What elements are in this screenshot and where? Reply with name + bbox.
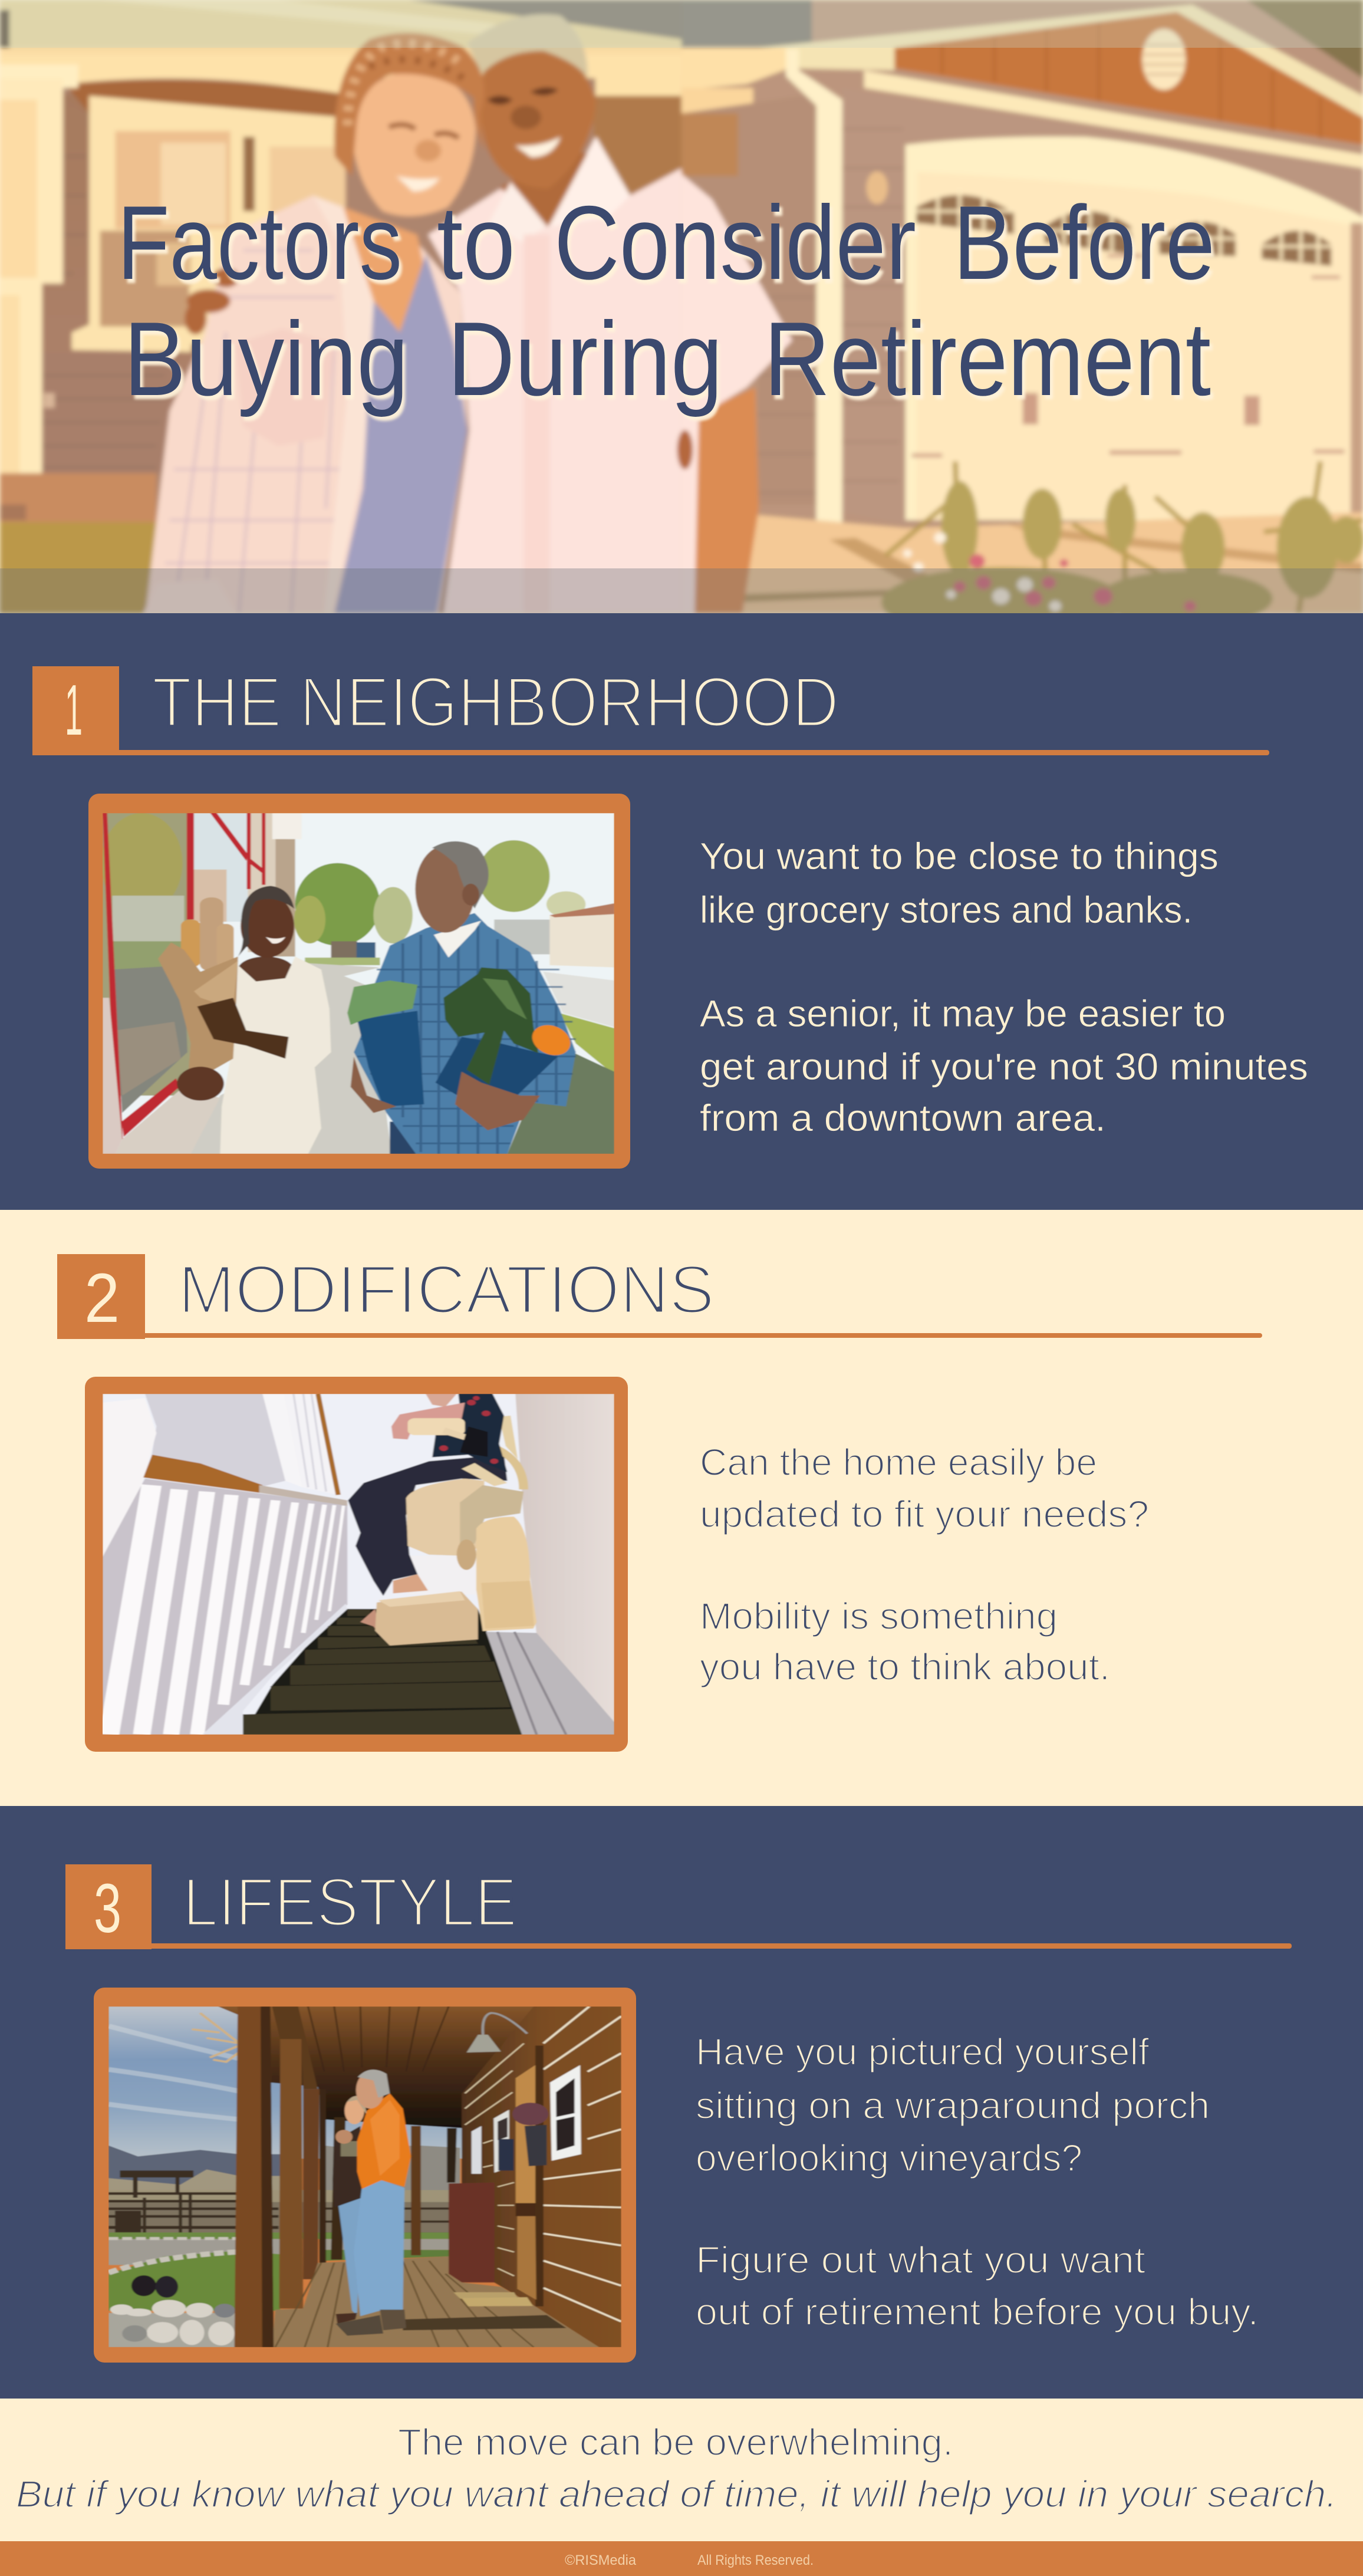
heading: modifications: MODIFICATIONS xyxy=(178,1251,715,1328)
bushes xyxy=(885,462,1363,613)
title: During xyxy=(447,300,723,417)
number badge 1: 1 xyxy=(65,670,83,750)
woman's shirt xyxy=(146,196,467,613)
text block: section 2: you have to think about. xyxy=(700,1646,1110,1688)
title xyxy=(117,184,1215,417)
far balusters xyxy=(262,1394,302,1487)
flower pot xyxy=(512,2103,548,2126)
text block: section 1: from a downtown area. xyxy=(700,1097,1106,1139)
text block: section 1: get around if you're not 30 minutes xyxy=(700,1045,1308,1088)
hands xyxy=(351,1057,396,1113)
gap under seat xyxy=(408,1556,476,1595)
mountains xyxy=(108,2146,280,2202)
track housing xyxy=(476,1516,536,1631)
heading underline xyxy=(65,1943,1292,1949)
handrail xyxy=(143,1455,262,1493)
right log wall xyxy=(462,2006,621,2347)
photo frame 1 xyxy=(88,794,630,1169)
trees xyxy=(295,863,380,946)
closing text: But if you know what you want ahead of time, it will help you in your search. xyxy=(16,2473,1337,2515)
closing text: The move can be overwhelming. xyxy=(398,2421,953,2463)
front post xyxy=(235,2006,274,2347)
woman xyxy=(337,2197,362,2315)
ceiling xyxy=(218,2006,534,2128)
stairs xyxy=(243,1609,527,1735)
footer credits: ©RISMedia xyxy=(565,2552,637,2568)
number badge 3: 3 xyxy=(94,1870,121,1947)
panel: section 2 modifications xyxy=(0,1210,1363,1806)
windows xyxy=(550,2065,581,2161)
background buildings xyxy=(494,920,549,955)
stair rail xyxy=(486,1632,614,1735)
bags and greens xyxy=(357,1011,424,1107)
text block: section 2: Mobility is something xyxy=(700,1595,1058,1637)
boots xyxy=(336,2313,357,2324)
woman's top xyxy=(335,254,467,613)
bottom darker band xyxy=(0,568,1363,613)
title: Factors xyxy=(117,184,402,301)
text block: section 1: As a senior, it may be easier to xyxy=(700,992,1226,1035)
panel: section 1 the neighborhood xyxy=(0,613,1363,1210)
photo: couple with groceries xyxy=(101,813,614,1154)
photo: senior couple in front of house xyxy=(0,0,1363,637)
door xyxy=(535,2045,544,2307)
white stringer xyxy=(202,1604,347,1735)
heading underline xyxy=(57,1333,1262,1338)
title: Retirement xyxy=(764,300,1211,417)
heading: lifestyle: LIFESTYLE xyxy=(183,1864,517,1940)
text block: section 2: Can the home easily be xyxy=(700,1441,1097,1483)
footer credits xyxy=(565,2552,814,2568)
title: Before xyxy=(953,184,1215,301)
text block: section 2: updated to fit your needs? xyxy=(700,1493,1149,1535)
man's head xyxy=(476,43,596,189)
panel: footer xyxy=(0,2541,1363,2576)
dogs xyxy=(131,2275,156,2296)
number badge 2 xyxy=(57,1254,145,1339)
storefront frames xyxy=(103,813,265,1143)
text block: section 2 xyxy=(700,1441,1149,1688)
text block: section 3: overlooking vineyards? xyxy=(696,2137,1082,2179)
number badge 2: 2 xyxy=(84,1259,120,1337)
text block: section 1: like grocery stores and banks. xyxy=(700,889,1193,931)
text block: section 3: sitting on a wraparound porch xyxy=(696,2084,1210,2127)
heading underline xyxy=(32,750,1269,755)
gable shingles xyxy=(894,12,1363,144)
text block: section 3: out of retirement before you buy. xyxy=(696,2291,1259,2333)
man xyxy=(390,1121,417,1154)
text block: section 3: Have you pictured yourself xyxy=(696,2031,1149,2073)
balusters xyxy=(103,1479,347,1735)
hand on shoulder xyxy=(185,268,239,334)
vent xyxy=(1142,29,1186,90)
title: Buying xyxy=(124,300,409,417)
footer credits: All Rights Reserved. xyxy=(697,2552,814,2568)
title: to xyxy=(437,184,515,301)
woman's head xyxy=(352,70,476,216)
antler xyxy=(192,2013,239,2062)
seat xyxy=(406,1479,485,1556)
bread and bag xyxy=(181,920,200,968)
blouse xyxy=(432,1394,507,1472)
panel: section 3 lifestyle xyxy=(0,1806,1363,2399)
man's arm and sleeve xyxy=(694,387,759,613)
panel: closing message xyxy=(0,2399,1363,2541)
number badge 1 xyxy=(32,666,119,755)
closing text xyxy=(16,2421,1337,2515)
woman xyxy=(238,956,294,983)
top lighter band xyxy=(0,0,1363,48)
photo: couple on porch xyxy=(108,2006,621,2347)
photo frame 2 xyxy=(85,1377,628,1752)
pavement xyxy=(190,963,391,1154)
text block: section 3: Figure out what you want xyxy=(696,2239,1145,2281)
number badge 3 xyxy=(65,1864,152,1949)
text block: section 1 xyxy=(700,835,1308,1139)
man's shirt xyxy=(428,137,682,613)
footrest xyxy=(375,1591,478,1646)
chair back xyxy=(499,1416,518,1459)
panel: hero photo with title xyxy=(0,0,1363,637)
text block: section 3 xyxy=(696,2031,1259,2333)
heading: the neighborhood: THE NEIGHBORHOOD xyxy=(152,663,839,742)
photo frame 3 xyxy=(94,1988,636,2363)
floor xyxy=(272,2256,599,2347)
title: Consider xyxy=(554,184,916,301)
legs xyxy=(348,1455,507,1596)
lamp xyxy=(483,2013,527,2035)
downspout xyxy=(786,49,842,536)
fence xyxy=(108,2202,460,2235)
driveway xyxy=(682,508,1363,613)
man xyxy=(354,2180,404,2316)
newel post xyxy=(103,1398,156,1568)
garage xyxy=(906,137,1363,520)
text block: section 1: You want to be close to things xyxy=(700,835,1219,877)
cabinet xyxy=(449,2183,495,2282)
right wall xyxy=(515,1394,614,1722)
posts xyxy=(331,2117,345,2259)
photo: stair lift xyxy=(103,1394,614,1735)
